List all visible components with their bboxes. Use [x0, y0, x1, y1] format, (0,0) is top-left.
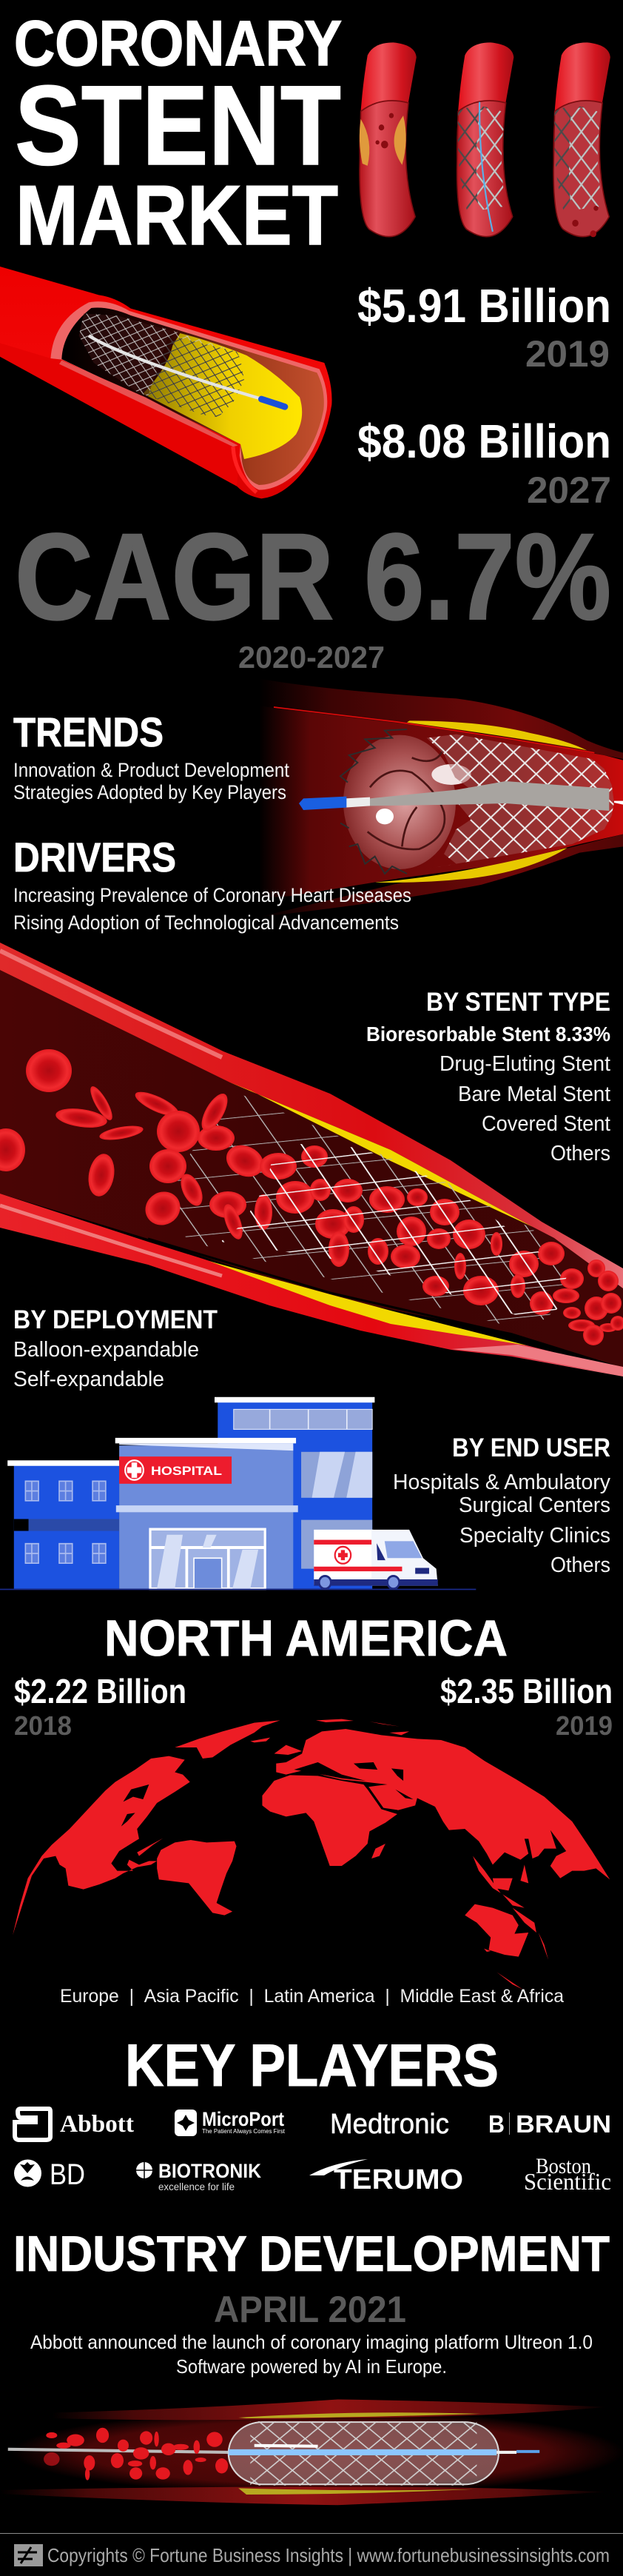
logo: Biotronik: [136, 2160, 261, 2192]
title: STENT: [15, 62, 341, 189]
blood cells: [0, 1049, 623, 1345]
stent: [427, 735, 614, 869]
balloon: [343, 735, 456, 869]
heading: key players: KEY PLAYERS: [125, 2033, 499, 2099]
stat: 2018 north america: $2.22 Billion: [14, 1672, 186, 1710]
logo: Boston Scientific: Boston: [536, 2154, 591, 2178]
heading: drivers: [13, 834, 411, 934]
drivers list: Increasing Prevalence of Coronary Heart Diseases: [13, 884, 411, 906]
segment: by stent type: Drug-Eluting Stent: [440, 1052, 610, 1076]
stat: 2027 market value: [357, 415, 611, 511]
logo: MicroPort: [175, 2108, 286, 2136]
stat: 2018 north america: [14, 1672, 186, 1741]
balloon spikes: [340, 729, 407, 874]
heading: north america: NORTH AMERICA: [104, 1610, 508, 1667]
logo: Boston Scientific: [524, 2154, 611, 2195]
illustration: balloon stent in vessel: [0, 2400, 623, 2505]
logo: Biotronik: excellence for life: [158, 2181, 235, 2192]
stent front layer: [220, 1143, 568, 1323]
catheter: [370, 781, 609, 811]
vessel lumen: [259, 706, 623, 898]
drivers list: Rising Adoption of Technological Advancements: [13, 911, 399, 934]
ambulance: [314, 1530, 438, 1589]
illustration: stent with blood cells in artery: [0, 943, 623, 1376]
continents: [13, 1719, 610, 1990]
lumen: [0, 970, 623, 1368]
logo: MicroPort: MicroPort: [202, 2108, 284, 2130]
world map globe: [13, 1719, 610, 1990]
segment: by end user: Others: [550, 1553, 610, 1577]
segment: by end user: Hospitals & Ambulatory: [393, 1471, 610, 1494]
title: MARKET: [16, 169, 338, 263]
artery with stent and wire: [457, 42, 513, 237]
segment: by deployment: [13, 1305, 218, 1391]
illustration: three artery stages: [360, 42, 610, 237]
logo: BD: BD: [50, 2158, 85, 2191]
main block: [115, 1438, 298, 1589]
segment: by stent type: Bioresorbable Stent 8.33%: [366, 1023, 610, 1046]
heading: drivers: DRIVERS: [13, 834, 176, 880]
logo: Terumo: TERUMO: [334, 2164, 463, 2195]
hospital sign label: HOSPITAL: [151, 1464, 222, 1478]
footer divider: [0, 2533, 623, 2534]
guide wire: [89, 335, 260, 398]
lower plaque: [375, 848, 568, 883]
upper wall: [0, 943, 623, 1288]
lower cut wall: [0, 343, 240, 486]
logo: Boston Scientific: Scientific: [524, 2168, 611, 2195]
illustration: opened artery with stent and plaque: [0, 267, 332, 498]
trends list: Innovation & Product Development: [13, 759, 289, 781]
stat: 2027 market value: 2027: [527, 469, 611, 511]
stat: CAGR: 2020-2027: [238, 640, 385, 675]
development description: Software powered by AI in Europe.: [176, 2355, 447, 2378]
segment: by end user: Specialty Clinics: [459, 1524, 610, 1548]
logo: MicroPort: The Patient Always Comes First: [202, 2128, 286, 2135]
title: CORONARY: [14, 8, 342, 79]
development description: Abbott announced the launch of coronary imaging platform Ultreon 1.0: [30, 2331, 593, 2353]
back building: [215, 1397, 374, 1589]
upper wall: [259, 679, 623, 759]
logo: Terumo: [309, 2159, 463, 2195]
upper plaque: [407, 720, 587, 750]
ground line: [0, 1589, 476, 1590]
segment: by stent type: [366, 988, 610, 1165]
artery with stent expanded: [553, 42, 610, 237]
development date: APRIL 2021: [214, 2289, 406, 2330]
stat: 2019 market value: 2019: [525, 333, 610, 375]
gap line: [148, 1239, 511, 1334]
lower plaque: [209, 1261, 527, 1345]
segment: by stent type: Bare Metal Stent: [458, 1083, 610, 1106]
stent: [79, 313, 244, 417]
trends list: Strategies Adopted by Key Players: [13, 781, 286, 803]
balloon and stent: [229, 2421, 539, 2486]
upper plaque: [230, 1083, 533, 1227]
pink rim and interior: [50, 301, 327, 490]
blood cells: [44, 2428, 228, 2480]
lower wall: [259, 834, 623, 917]
logo: B. Braun: BRAUN: [516, 2110, 611, 2138]
title: [14, 8, 342, 263]
segment: by stent type: BY STENT TYPE: [426, 988, 610, 1017]
development description: [30, 2331, 593, 2378]
heading: trends: [13, 709, 289, 803]
key player logos: [14, 2108, 611, 2195]
vessel shell: [0, 267, 332, 498]
segment: by end user: Surgical Centers: [459, 1493, 610, 1517]
lower wall: [0, 1194, 623, 1376]
footer logo: [14, 2544, 43, 2566]
illustration: hospital and ambulance: [0, 1397, 476, 1590]
stat: 2018 north america: 2018: [14, 1710, 72, 1741]
logo: B. Braun: B: [488, 2110, 505, 2138]
logo: Abbott: [15, 2109, 134, 2140]
segment: by end user: [393, 1433, 610, 1577]
plaque: [143, 333, 302, 459]
stat: 2019 market value: [357, 279, 611, 375]
segment: by stent type: Covered Stent: [482, 1112, 610, 1136]
seas and lakes: [121, 1762, 413, 1827]
heading: trends: TRENDS: [13, 709, 164, 755]
segment: by stent type: Others: [550, 1142, 610, 1165]
stat: 2019 north america: [440, 1672, 613, 1741]
artery with plaque: [360, 42, 417, 237]
logo: Medtronic: Medtronic: [330, 2109, 449, 2140]
left wing: [7, 1460, 119, 1589]
logo: Abbott: Abbott: [60, 2111, 134, 2138]
stat: 2019 north america: 2019: [556, 1710, 613, 1741]
logo: Biotronik: BIOTRONIK: [158, 2160, 261, 2182]
stent back layer: [175, 1092, 568, 1331]
hospital sign: [119, 1456, 232, 1484]
other regions: Europe | Asia Pacific | Latin America | Middle East & Africa: [60, 1986, 564, 2007]
segment: by deployment: Self-expandable: [13, 1368, 164, 1391]
drivers list: [13, 884, 411, 934]
illustration: balloon and stent in artery: [259, 679, 623, 917]
segment: by deployment: Balloon-expandable: [13, 1338, 199, 1362]
segment: by deployment: BY DEPLOYMENT: [13, 1305, 218, 1334]
logo: BD: [14, 2158, 85, 2191]
trends list: [13, 759, 289, 803]
